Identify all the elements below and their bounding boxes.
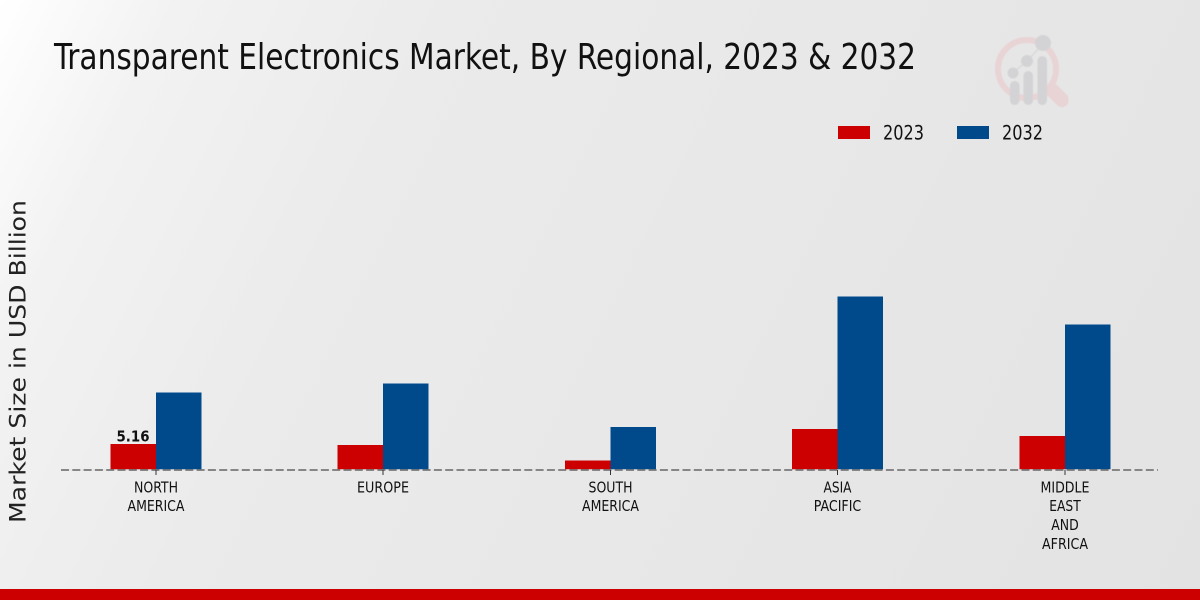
- label: Asia Pacific: ASIA: [824, 478, 852, 496]
- label: Europe: EUROPE: [357, 478, 409, 496]
- label: Asia Pacific: [814, 478, 861, 515]
- title: Transparent Electronics Market, By Regional, 2023 & 2032: [53, 37, 916, 78]
- label: Middle East and Africa: AND: [1051, 516, 1079, 534]
- region: North America: [110, 392, 202, 470]
- label: Middle East and Africa: AFRICA: [1042, 535, 1088, 553]
- region: Europe: [338, 384, 428, 470]
- icon: watermark logo: [998, 35, 1062, 105]
- label: North America: [128, 478, 185, 515]
- region: Asia Pacific: [792, 296, 883, 470]
- label: Asia Pacific: PACIFIC: [814, 497, 861, 515]
- legend: [838, 122, 1043, 144]
- label: Middle East and Africa: EAST: [1049, 497, 1081, 515]
- bar chart: [61, 296, 1158, 475]
- label: Middle East and Africa: [1040, 478, 1090, 553]
- footer bar: [0, 589, 1200, 600]
- label: South America: AMERICA: [582, 497, 639, 515]
- label: North America: NORTH: [134, 478, 178, 496]
- legend item: 2032: [957, 122, 1043, 144]
- label: South America: SOUTH: [588, 478, 632, 496]
- legend item: 2023: [838, 122, 924, 144]
- region: South America: [565, 427, 656, 470]
- label: Middle East and Africa: MIDDLE: [1040, 478, 1090, 496]
- label: North America: AMERICA: [128, 497, 185, 515]
- legend item: 2032: 2032: [1002, 122, 1043, 144]
- data label: 5.16: 5.16: [116, 428, 150, 446]
- y-axis label: Market Size in USD Billion: [6, 200, 32, 523]
- label: South America: [582, 478, 639, 515]
- baseline: [61, 469, 1158, 471]
- legend item: 2023: 2023: [883, 122, 924, 144]
- region: Middle East and Africa: [1020, 324, 1110, 470]
- x-axis labels: [128, 478, 1090, 553]
